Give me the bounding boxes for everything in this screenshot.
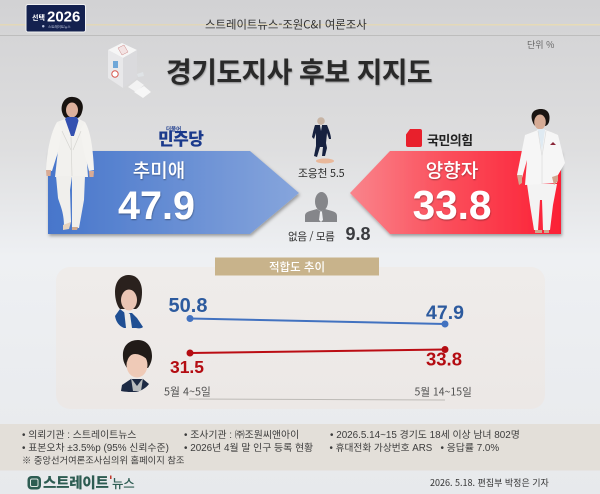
- value: 47.9: 47.9: [118, 184, 195, 228]
- icon: undecided silhouette: [305, 192, 337, 222]
- survey methodology box: • 표본오차 ±3.5%p (95% 신뢰수준): [22, 442, 169, 454]
- unit label: 단위 %: [527, 38, 554, 51]
- party logo: Democratic Party: 더불어: [166, 125, 181, 133]
- election 2026 badge: 2026: [47, 8, 80, 26]
- panel: suitability trend: [56, 258, 545, 409]
- line chart: Yang Hyang-ja series: 31.5: [170, 357, 204, 377]
- line chart: Choo Mi-ae series: 47.9: [426, 302, 464, 324]
- party logo: Democratic Party: 민주당: [158, 125, 204, 150]
- candidate name: Choo Mi-ae: 추미애: [133, 156, 185, 183]
- portrait: Yang Hyang-ja: [121, 340, 152, 392]
- panel heading: [215, 258, 379, 276]
- figure: Choo Mi-ae: [46, 97, 94, 230]
- election 2026 badge: [26, 4, 86, 32]
- figure: Jo Eung-cheon: [312, 117, 334, 164]
- party logo: People Power Party: [406, 129, 472, 149]
- line chart: Yang Hyang-ja series: 33.8: [426, 348, 462, 370]
- chart axis: 5월 14~15일: [414, 384, 472, 400]
- survey methodology box: ※ 중앙선거여론조사심의위 홈페이지 참조: [22, 454, 185, 466]
- survey methodology box: • 응답률 7.0%: [440, 442, 499, 454]
- value: 33.8: 33.8: [413, 182, 491, 228]
- title: 경기도지사 후보 지지도: [166, 51, 432, 91]
- survey methodology box: • 의뢰기관 : 스트레이트뉴스: [22, 429, 136, 441]
- label: none / don't know 9.8: 없음 / 모름: [288, 229, 335, 244]
- survey methodology box: • 휴대전화 가상번호 ARS: [330, 442, 433, 454]
- panel: Democratic candidate arrow: [48, 151, 299, 234]
- chart axis: 5월 4~5일: [164, 384, 211, 400]
- logo: Straight News: 뉴스: [112, 473, 134, 492]
- survey methodology box: • 2026.5.14~15 경기도 18세 이상 남녀 802명: [330, 428, 520, 441]
- panel heading: 적합도 추이: [269, 259, 325, 275]
- line chart: Yang Hyang-ja series: [170, 346, 462, 377]
- line chart: Choo Mi-ae series: [169, 295, 464, 328]
- election 2026 badge: 스트레이트뉴스: [48, 24, 71, 30]
- candidate name: Yang Hyang-ja: 양향자: [426, 156, 479, 183]
- label: Jo Eung-cheon 5.5: 조응천 5.5: [298, 165, 345, 181]
- byline: 2026. 5.18. 편집부 박정은 기자: [430, 476, 550, 489]
- portrait: Choo Mi-ae: [115, 275, 143, 328]
- icon: ballot box: [108, 43, 151, 98]
- logo: Straight News: 스트레이트: [43, 472, 109, 493]
- label: none / don't know 9.8: 9.8: [346, 224, 371, 244]
- line chart: Choo Mi-ae series: 50.8: [169, 295, 207, 317]
- logo: Straight News: [28, 472, 134, 493]
- label: none / don't know 9.8: [288, 224, 371, 244]
- survey source heading: 스트레이트뉴스-조원C&I 여론조사: [205, 16, 367, 32]
- party logo: People Power Party: 국민의힘: [427, 130, 472, 149]
- figure: Yang Hyang-ja: [517, 109, 565, 233]
- chart axis: [164, 384, 472, 400]
- election 2026 badge: 선택: [32, 13, 45, 23]
- survey methodology box: • 조사기관 : ㈜조원씨앤아이: [184, 428, 299, 441]
- survey methodology box: • 2026년 4월 말 인구 등록 현황: [184, 442, 313, 454]
- header band: [0, 24, 600, 36]
- panel: People Power candidate arrow: [350, 151, 561, 234]
- survey methodology box: [0, 424, 600, 470]
